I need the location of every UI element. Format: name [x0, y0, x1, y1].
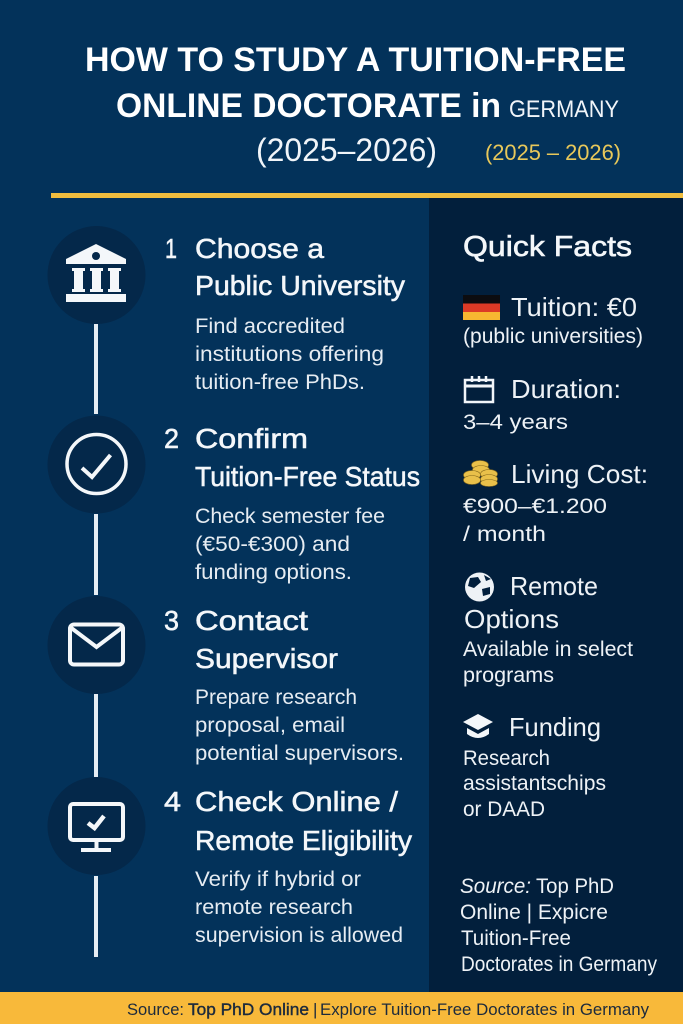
timeline connectors	[94, 324, 98, 957]
source note: Doctorates in Germany	[461, 953, 657, 976]
icon: envelope	[48, 596, 146, 694]
fact: funding	[463, 712, 606, 821]
fact: duration: Duration:	[511, 374, 621, 404]
title: (2025 – 2026)	[485, 140, 621, 165]
step 4 heading	[164, 786, 412, 856]
step 3 heading: Supervisor	[195, 643, 338, 674]
step 2 heading: Confirm	[195, 423, 308, 454]
step 1 heading	[165, 233, 405, 301]
step 4 description	[195, 868, 403, 947]
gold divider	[51, 193, 683, 198]
step 1 description	[195, 315, 384, 394]
step 2 description: Check semester fee	[195, 505, 385, 528]
fact: funding: Research	[463, 747, 550, 770]
fact: tuition	[463, 292, 643, 348]
icon: university building	[48, 226, 146, 324]
footer bar: Top PhD Online	[188, 1000, 309, 1019]
title: HOW TO STUDY A TUITION-FREE	[85, 41, 626, 79]
panel: quick facts background	[429, 198, 683, 992]
step 4 description: Verify if hybrid or	[195, 868, 361, 891]
fact: duration	[463, 374, 621, 434]
title: (2025–2026)	[256, 132, 437, 168]
step 2 heading	[164, 423, 420, 492]
step 3 heading: 3	[164, 605, 179, 636]
step 1 description: tuition-free PhDs.	[195, 371, 365, 394]
step 2 description: funding options.	[195, 561, 352, 584]
fact: tuition: (public universities)	[463, 325, 643, 348]
footer bar	[0, 992, 683, 1024]
step 4 heading: Check Online /	[195, 786, 398, 817]
fact: living cost: Living Cost:	[511, 459, 648, 489]
step 3 description: potential supervisors.	[195, 742, 404, 765]
fact: living cost	[463, 459, 648, 546]
step 4 heading: Remote Eligibility	[195, 825, 412, 856]
icon: german flag	[463, 295, 500, 320]
fact: remote options: Available in select	[463, 638, 633, 661]
step 3 heading: Contact	[195, 605, 308, 636]
step 4	[48, 777, 412, 947]
step 2 heading: 2	[164, 423, 179, 454]
fact: living cost: / month	[463, 523, 546, 546]
step 3 description: Prepare research	[195, 686, 357, 709]
icon: monitor with check	[48, 777, 146, 875]
step 4 heading: 4	[164, 786, 181, 817]
fact: remote options: Options	[464, 604, 559, 634]
fact: living cost: €900–€1.200	[463, 495, 607, 518]
step 2 description	[195, 505, 385, 584]
footer bar: Explore Tuition-Free Doctorates in Germany	[320, 1000, 649, 1019]
fact: remote options	[463, 571, 633, 687]
title: ONLINE DOCTORATE in	[116, 87, 501, 125]
title	[85, 41, 626, 168]
fact: funding: Funding	[509, 712, 601, 742]
source note	[460, 875, 657, 976]
source note: Top PhD	[536, 875, 614, 898]
source note: Online | Expicre	[460, 901, 608, 924]
quick facts heading: Quick Facts	[463, 231, 632, 263]
fact: tuition: Tuition: €0	[511, 292, 637, 322]
step 1 description: institutions offering	[195, 343, 384, 366]
source note: Tuition-Free	[461, 927, 571, 950]
icon: graduation cap	[463, 714, 493, 738]
step 3 description: proposal, email	[195, 714, 345, 737]
step 1 heading: Public University	[195, 270, 405, 301]
step 3 heading	[164, 605, 338, 674]
icon: coins	[464, 460, 498, 486]
step 2 heading: Tuition-Free Status	[195, 461, 420, 492]
step 4 description: supervision is allowed	[195, 924, 403, 947]
fact: funding: or DAAD	[463, 798, 545, 821]
step 1 description: Find accredited	[195, 315, 345, 338]
fact: funding: assistantschips	[463, 772, 606, 795]
source note: Source:	[460, 875, 531, 898]
icon: globe	[465, 572, 494, 602]
title: GERMANY	[509, 96, 619, 123]
icon: calendar	[465, 376, 493, 402]
footer bar: |	[313, 1000, 317, 1019]
step 2	[48, 416, 420, 584]
step 4 description: remote research	[195, 896, 353, 919]
step 2 description: (€50-€300) and	[195, 533, 350, 556]
step 1 heading: 1	[165, 233, 177, 264]
step 3 description	[195, 686, 404, 765]
step 1	[48, 226, 405, 394]
footer bar: Source:	[127, 1000, 184, 1019]
fact: remote options: programs	[463, 664, 554, 687]
icon: check circle	[48, 416, 146, 514]
fact: duration: 3–4 years	[463, 411, 568, 434]
step 1 heading: Choose a	[195, 233, 324, 264]
step 3	[48, 596, 404, 765]
fact: remote options: Remote	[510, 571, 598, 601]
